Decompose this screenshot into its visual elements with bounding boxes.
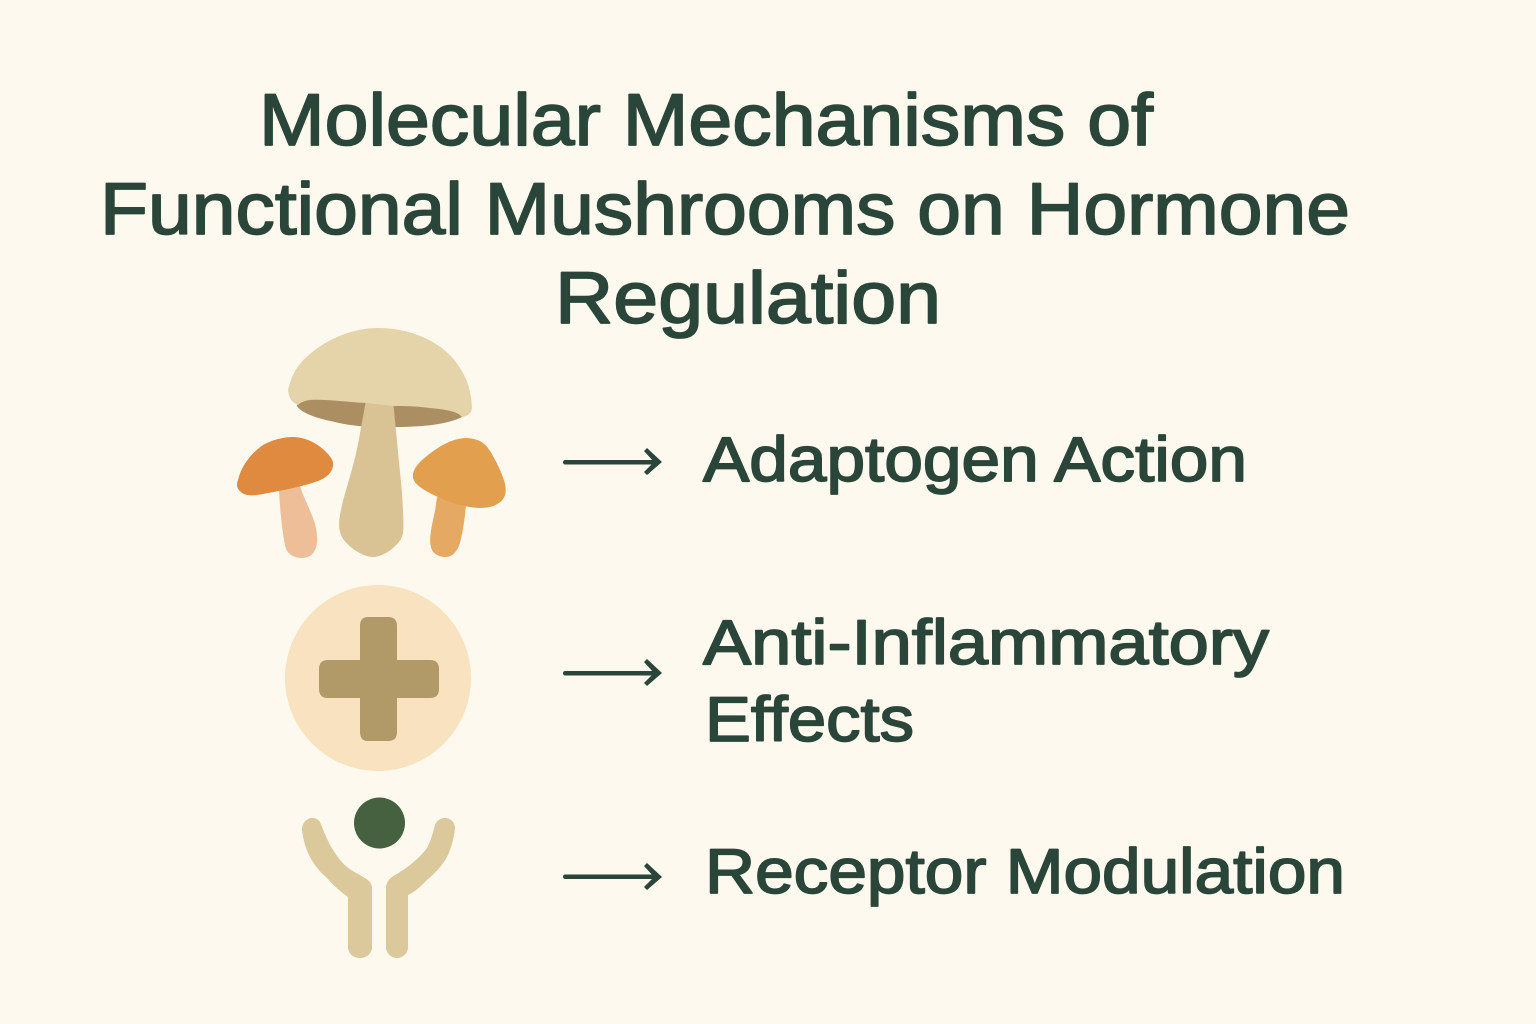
arrow 1 <box>563 448 662 475</box>
label: anti-inflammatory effects: Effects <box>705 685 914 755</box>
label: adaptogen action: Adaptogen Action <box>703 425 1247 495</box>
left mushroom cap <box>237 437 333 495</box>
icon: mushrooms <box>237 328 506 558</box>
large mushroom gills <box>297 395 462 427</box>
title: Regulation <box>555 258 941 339</box>
large mushroom cap <box>288 328 472 417</box>
label: anti-inflammatory effects <box>703 608 1270 755</box>
left mushroom stem <box>279 486 317 558</box>
title <box>100 80 1350 339</box>
label: receptor modulation: Receptor Modulation <box>705 837 1345 907</box>
arrow 2 <box>563 659 662 686</box>
arrow 3 <box>563 863 662 890</box>
right mushroom cap <box>413 438 506 508</box>
receptor left arm <box>302 818 372 958</box>
icon: medical cross <box>285 585 471 771</box>
label: anti-inflammatory effects: Anti-Inflammatory <box>703 608 1270 678</box>
title: Molecular Mechanisms of <box>259 80 1154 161</box>
title: Functional Mushrooms on Hormone <box>100 169 1350 250</box>
ligand <box>354 798 405 848</box>
receptor right arm <box>386 818 455 958</box>
right mushroom stem <box>430 497 466 557</box>
icon: receptor and ligand <box>302 798 455 958</box>
large mushroom stem <box>339 400 403 557</box>
